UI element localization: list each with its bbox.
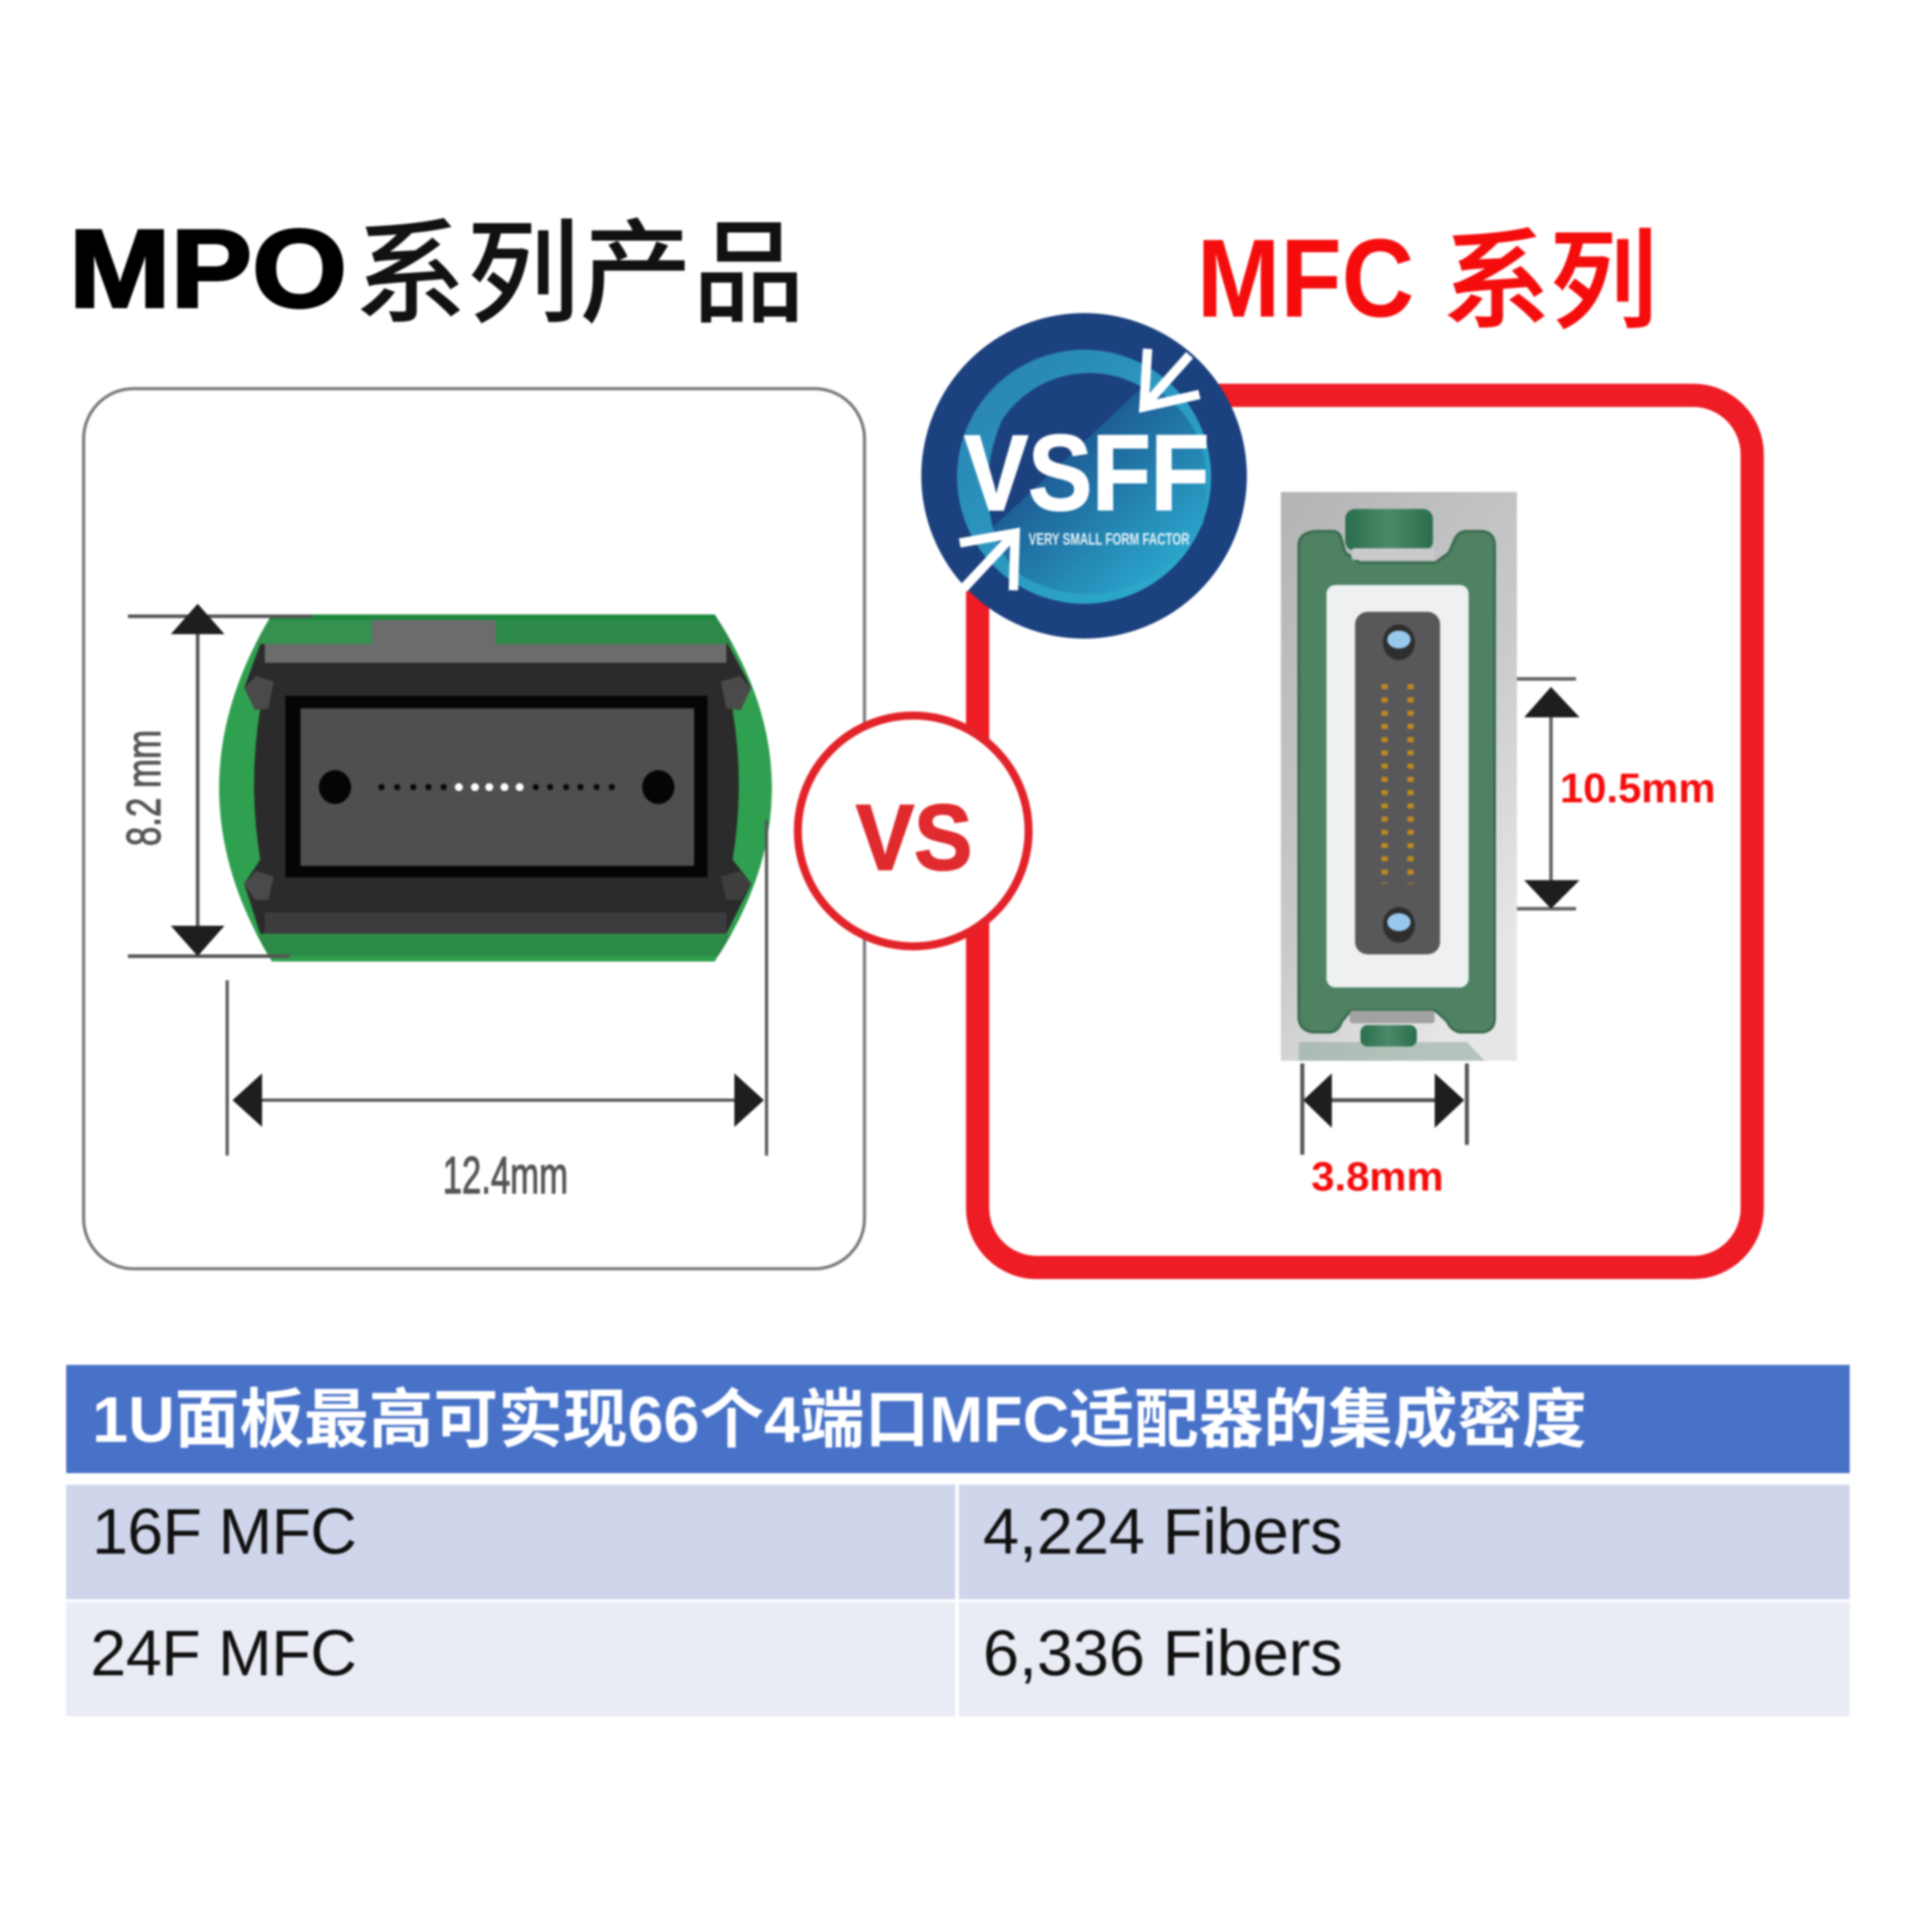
dimension: height 8.2 mm xyxy=(117,604,313,956)
table: MFC density xyxy=(66,1365,1850,1716)
heading: MPO series: 系列产品 xyxy=(354,211,805,337)
dimension: width 3.8mm xyxy=(1302,1063,1467,1199)
VS badge: VS xyxy=(856,786,972,890)
dimension: width 12.4mm: 12.4mm xyxy=(443,1147,568,1205)
table header xyxy=(66,1365,1850,1473)
table row: 16F MFC: 4,224 Fibers xyxy=(983,1496,1343,1568)
VSFF logo badge xyxy=(921,313,1247,639)
table header: 1U面板最高可实现66个4端口MFC适配器的集成密度 xyxy=(92,1385,1587,1456)
table row: 16F MFC: 16F MFC xyxy=(92,1496,357,1568)
panel: MFC connector xyxy=(978,395,1752,1267)
dimension: height 10.5mm: 10.5mm xyxy=(1560,765,1716,811)
panel: MPO connector xyxy=(84,388,864,1268)
heading: MPO series xyxy=(69,208,805,337)
dimension: width 12.4mm xyxy=(227,820,767,1205)
table row: 24F MFC: 6,336 Fibers xyxy=(983,1617,1343,1690)
MFC connector illustration xyxy=(1281,492,1517,1061)
dimension: width 3.8mm: 3.8mm xyxy=(1311,1154,1444,1199)
VSFF logo badge: VERY SMALL FORM FACTOR xyxy=(1029,530,1190,548)
heading: MFC series xyxy=(1197,217,1657,342)
heading: MFC series: 系列 xyxy=(1443,222,1657,342)
MPO connector illustration xyxy=(215,614,778,962)
VSFF arrows xyxy=(960,349,1199,590)
dimension: height 10.5mm xyxy=(1517,679,1716,909)
table row: 16F MFC xyxy=(66,1485,1850,1599)
heading: MPO series: MPO xyxy=(69,208,347,331)
table row: 24F MFC xyxy=(66,1602,1850,1716)
heading: MFC series: MFC xyxy=(1197,217,1414,341)
table row: 24F MFC: 24F MFC xyxy=(90,1618,357,1690)
VS badge xyxy=(798,716,1029,946)
VSFF logo badge: VSFF xyxy=(964,413,1209,533)
dimension: height 8.2 mm: 8.2 mm xyxy=(117,730,171,846)
